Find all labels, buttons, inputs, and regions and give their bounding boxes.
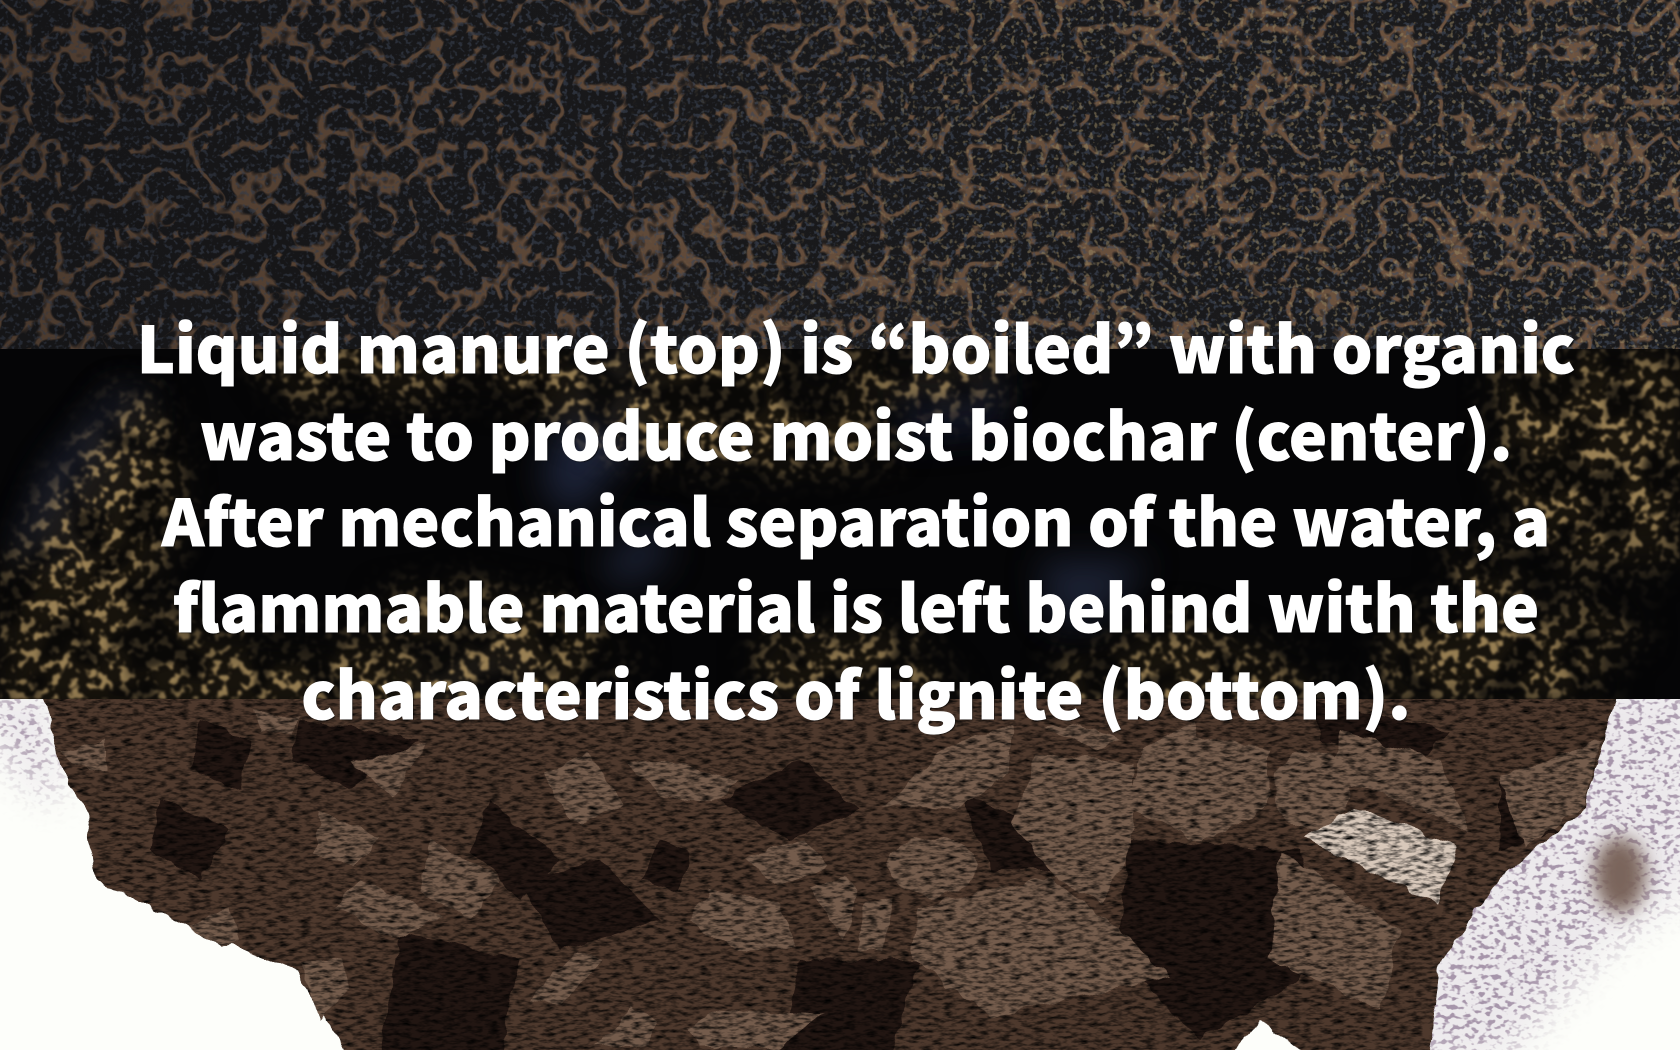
light wood chip [1302,807,1457,905]
panel: moist biochar (center) [0,349,1680,700]
caption line 5: characteristics of lignite (bottom). [301,646,1411,738]
caption line 4: flammable material is left behind with the [173,559,1539,651]
caption line 1: Liquid manure (top) is “boiled” with organic [137,300,1575,392]
brown mass of chips [40,675,1624,1050]
caption line 3: After mechanical separation of the water, a [162,473,1550,565]
caption line 2: waste to produce moist biochar (center). [200,387,1512,479]
textile speckle [0,699,1680,1050]
panel: lignite-like material (bottom) [0,675,1680,1050]
panel: liquid manure (top) [0,0,1680,349]
